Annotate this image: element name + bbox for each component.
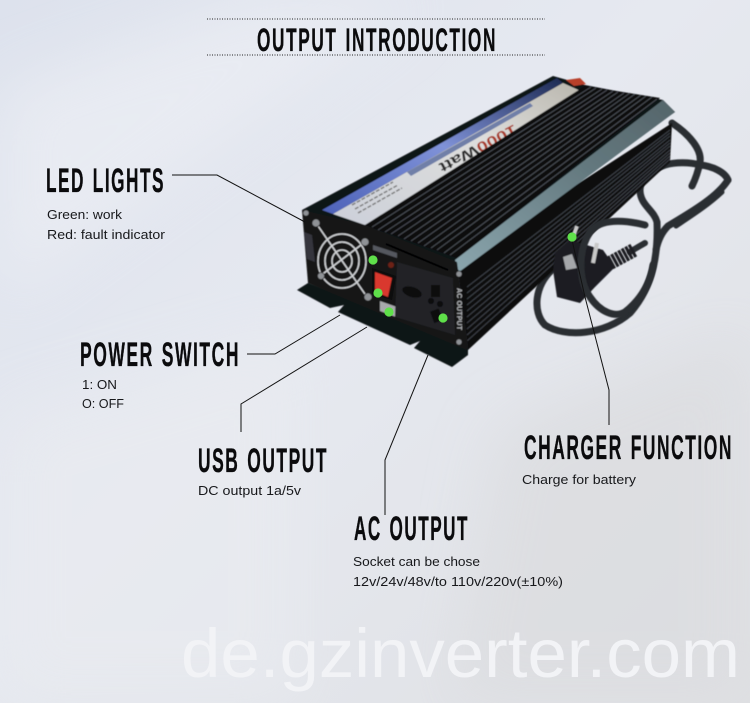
socket holes [401,284,443,323]
callout: USB output: DC output 1a/5v [198,483,302,498]
top fins [365,86,660,258]
callout: AC output: 12v/24v/48v/to 110v/220v(±10%) [353,574,563,589]
callout: power switch: POWER SWITCH [80,336,240,374]
icon: plug [553,226,634,303]
red indicator [566,78,586,86]
ac output label: AC OUTPUT [455,288,462,331]
icon: inner cord loop [581,221,653,314]
switch housing [372,268,396,300]
socket panel [395,262,455,335]
callout: charger function [522,429,733,487]
top surface [302,76,675,262]
callout: USB output [198,442,328,498]
fan guard [316,223,367,297]
callout: USB output: USB OUTPUT [198,442,328,480]
dark title strip on label [407,103,533,176]
title: OUTPUT INTRODUCTION [257,22,497,58]
screws [303,210,462,345]
callout: charger function: Charge for battery [522,472,637,487]
teal side strip [455,100,675,272]
callout: power switch: 1: ON [82,377,117,392]
leader lines [172,175,609,515]
side sticker [304,232,315,262]
side fins [457,123,672,350]
usb port [380,301,397,317]
callout: AC output [353,510,563,589]
base plate [297,283,468,367]
blue band [322,78,563,214]
model text: 1000Watt [436,121,520,176]
callout: LED lights [46,162,166,242]
panel: inverter body [297,76,675,367]
callout: AC output: AC OUTPUT [354,510,469,548]
callout: power switch [80,336,240,411]
callout: LED lights: Red: fault indicator [47,227,166,242]
control panel strip [373,245,397,258]
icon: power cords behind inverter [537,123,728,333]
callout: LED lights: LED LIGHTS [46,162,165,200]
silver label [333,83,583,225]
spec lines [352,182,402,213]
green markers [368,232,577,323]
socket slot [386,244,448,270]
watermark: de.gzinverter.com [181,615,740,692]
callout: LED lights: Green: work [47,207,123,222]
front face [302,210,468,350]
callout: power switch: O: OFF [82,396,124,411]
callout: AC output: Socket can be chose [353,554,480,569]
icon: power switch [375,272,392,297]
